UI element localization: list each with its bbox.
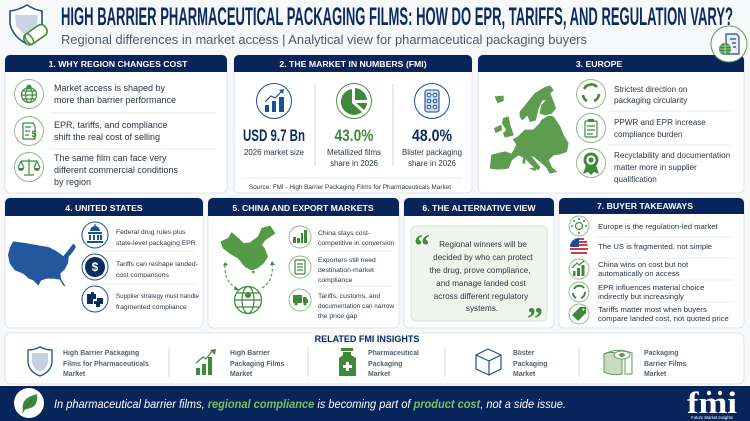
- quote box: ”: [527, 300, 543, 336]
- icon: film roll: [604, 350, 632, 375]
- icon: puzzle: [82, 286, 108, 312]
- text: cost competitive: China stays cost-: [318, 230, 370, 237]
- text: related 1: High Barrier Packaging: [63, 350, 139, 357]
- header: panel 1: 1. WHY REGION CHANGES COST: [49, 59, 188, 69]
- text: related 3: Market: [368, 371, 391, 378]
- icon: europe stars: [569, 216, 589, 236]
- header: panel 6: [404, 198, 554, 216]
- icon: recycling small: [569, 282, 589, 302]
- text: epr: EPR influences material choice: [598, 283, 704, 292]
- text: tariffs: compare landed cost, not quoted price: [598, 314, 729, 323]
- icon: globe: [234, 286, 262, 314]
- text: tariffs customs: documentation can narrow: [318, 303, 394, 310]
- text: related 2: High Barrier: [230, 350, 270, 357]
- text: related 4: Packaging: [513, 361, 547, 368]
- map: china: [221, 226, 275, 273]
- quote box: Regional winners will be: [439, 240, 527, 249]
- stat: metallized films share: share in 2026: [330, 159, 379, 168]
- icon: document with globe: [711, 26, 747, 62]
- text: related 1: Market: [63, 371, 86, 378]
- quote box: decided by who can protect: [433, 253, 534, 262]
- text: tariffs: Tariffs matter most when buyers: [598, 305, 707, 314]
- text: related 5: Barrier Films: [644, 361, 687, 368]
- logo: fmi: Future Market Insights: [691, 415, 733, 420]
- text: same film: by region: [54, 177, 91, 187]
- icon: us flag: [570, 238, 588, 256]
- stat: market size: 2026 market size: [244, 148, 305, 157]
- text: EPR tariffs: shift the real cost of selling: [54, 132, 160, 142]
- icon: checklist: [289, 256, 311, 278]
- icon: box: [476, 349, 501, 375]
- logo: fmi: fmi: [687, 385, 737, 420]
- panel: buyer takeaways: [559, 198, 744, 328]
- icon: document with dollar: [14, 116, 44, 146]
- header: panel 5: [208, 198, 399, 216]
- text: PPWR: PPWR and EPR increase: [614, 118, 706, 127]
- icon: document with dollar: $: [31, 129, 37, 139]
- quote box: “: [414, 227, 430, 263]
- text: related 1: Films for Pharmaceuticals: [63, 361, 149, 368]
- quote box: and manage landed cost: [436, 279, 527, 288]
- icon: scales: [14, 152, 44, 182]
- quote box: [411, 226, 547, 336]
- text: related 3: Packaging: [368, 361, 402, 368]
- text: recyclability: qualification: [614, 175, 657, 184]
- stat: metallized films share: 43.0%: [334, 126, 374, 145]
- panel: the alternative view: [404, 198, 554, 336]
- text: related 2: Market: [230, 371, 253, 378]
- stat: market size: USD 9.7 Bn: [243, 126, 305, 145]
- text: china: automatically on access: [598, 269, 680, 278]
- panel: united states: [5, 198, 203, 328]
- panel: why region changes cost: [5, 55, 227, 193]
- text: supplier strategy: fragmented compliance: [116, 304, 187, 311]
- footer message: In pharmaceutical barrier films, regional compliance is becoming part of product cost, not a side issue.: [54, 397, 566, 411]
- icon: growth chart: [569, 259, 589, 279]
- icon: globe with pin: [14, 80, 44, 108]
- quote box: systems.: [466, 304, 498, 313]
- text: tariffs: cost comparisons: [116, 272, 169, 279]
- text: related 2: Packaging Films: [230, 361, 285, 368]
- text: cost competitive: competitive in conversion: [318, 240, 395, 247]
- text: recyclability: Recyclability and documentation: [614, 151, 730, 160]
- panel: europe: [478, 55, 744, 193]
- text: federal rules: Federal drug rules plus: [116, 229, 186, 236]
- text: related 5: Market: [644, 371, 667, 378]
- stat: metallized films share: [327, 84, 381, 168]
- icon: factory: [289, 226, 311, 248]
- map: united states: [8, 242, 76, 286]
- stat: blister packaging share: share in 2026: [408, 159, 457, 168]
- arrowheads: export flow: [223, 261, 275, 290]
- header: panel 3: 3. EUROPE: [576, 59, 622, 69]
- header: panel 7: [559, 198, 744, 214]
- heading: related FMI insights: RELATED FMI INSIGHTS: [315, 334, 419, 344]
- map: europe: [490, 86, 568, 173]
- icon: capitol: [82, 222, 108, 248]
- header: panel 6: 6. THE ALTERNATIVE VIEW: [422, 203, 536, 213]
- text: europe: Europe is the regulation-led market: [598, 222, 719, 231]
- subtitle: Regional differences in market access | Analytical view for pharmaceutical packaging buyers: [61, 32, 587, 47]
- icon: bottle: [339, 348, 356, 376]
- text: circularity: packaging circularity: [614, 96, 688, 105]
- text: federal rules: state-level packaging EPR: [116, 240, 196, 247]
- text: exporters: destination-market: [318, 267, 374, 274]
- icon: price tag: [569, 304, 589, 324]
- icon: leaf: [14, 388, 44, 418]
- text: tariffs customs: the price gap: [318, 313, 358, 320]
- quote box: across different regulatory: [434, 292, 529, 301]
- header: panel 2: [234, 55, 472, 72]
- text: EPR tariffs: EPR, tariffs, and compliance: [54, 120, 167, 130]
- stat: metallized films share: Metallized films: [327, 148, 381, 157]
- panel: related insights: [5, 330, 744, 384]
- stat: blister packaging share: Blister packaging: [402, 148, 462, 157]
- text: related 4: Market: [513, 371, 536, 378]
- text: circularity: Strictest direction on: [614, 85, 687, 94]
- text: related 5: Packaging: [644, 350, 678, 357]
- footer banner: [0, 385, 750, 421]
- header: panel 7: 7. BUYER TAKEAWAYS: [597, 201, 693, 211]
- text: related 3: Pharmaceutical: [368, 350, 419, 357]
- text: tariffs customs: Tariffs, customs, and: [318, 293, 380, 300]
- text: related 4: Blister: [513, 350, 535, 357]
- icon: award badge: [576, 148, 606, 178]
- icon: recycling: [576, 80, 606, 108]
- text: same film: The same film can face very: [54, 153, 167, 163]
- icon: growth chart: [196, 349, 216, 375]
- panel: china and export markets: [208, 198, 399, 328]
- panel: market in numbers: [234, 55, 472, 193]
- text: same film: different commercial conditions: [54, 165, 178, 175]
- icon: shield: [28, 347, 52, 376]
- text: market access: Market access is shaped by: [54, 83, 166, 93]
- stat: blister packaging share: [402, 84, 462, 168]
- icon: clipboard: [576, 114, 606, 142]
- header: panel 5: 5. CHINA AND EXPORT MARKETS: [232, 203, 374, 213]
- text: exporters: Exporters still need: [318, 257, 376, 264]
- header: panel 3: [478, 55, 744, 72]
- text: tariffs: Tariffs can reshape landed-: [116, 261, 198, 268]
- arrows: export flow: [225, 265, 272, 288]
- header: panel 2: 2. THE MARKET IN NUMBERS (FMI): [279, 59, 427, 69]
- source note: Source: FMI - High Barrier Packaging Films for Pharmaceuticals Market: [249, 185, 451, 191]
- header: panel 1: [5, 55, 227, 72]
- text: PPWR: compliance burden: [614, 130, 682, 139]
- text: recyclability: matter more in supplier: [614, 163, 697, 172]
- stat: market size: [243, 84, 305, 157]
- text: market access: more than barrier performance: [54, 95, 176, 105]
- header: panel 4: 4. UNITED STATES: [65, 203, 143, 213]
- header: panel 4: [5, 198, 203, 216]
- text: us: The US is fragmented, not simple: [598, 242, 712, 251]
- text: epr: indirectly but increasingly: [598, 292, 684, 301]
- icon: dollar: $: [92, 260, 99, 274]
- icon: truck: [289, 289, 311, 311]
- text: china: China wins on cost but not: [598, 260, 689, 269]
- stat: blister packaging share: 48.0%: [412, 126, 452, 145]
- text: exporters: compliance: [318, 277, 353, 284]
- text: supplier strategy: Supplier strategy must handle: [116, 293, 199, 300]
- quote box: the drug, prove compliance,: [429, 266, 531, 275]
- icon: dollar: [82, 254, 108, 280]
- icon: shield with film roll: [10, 5, 49, 47]
